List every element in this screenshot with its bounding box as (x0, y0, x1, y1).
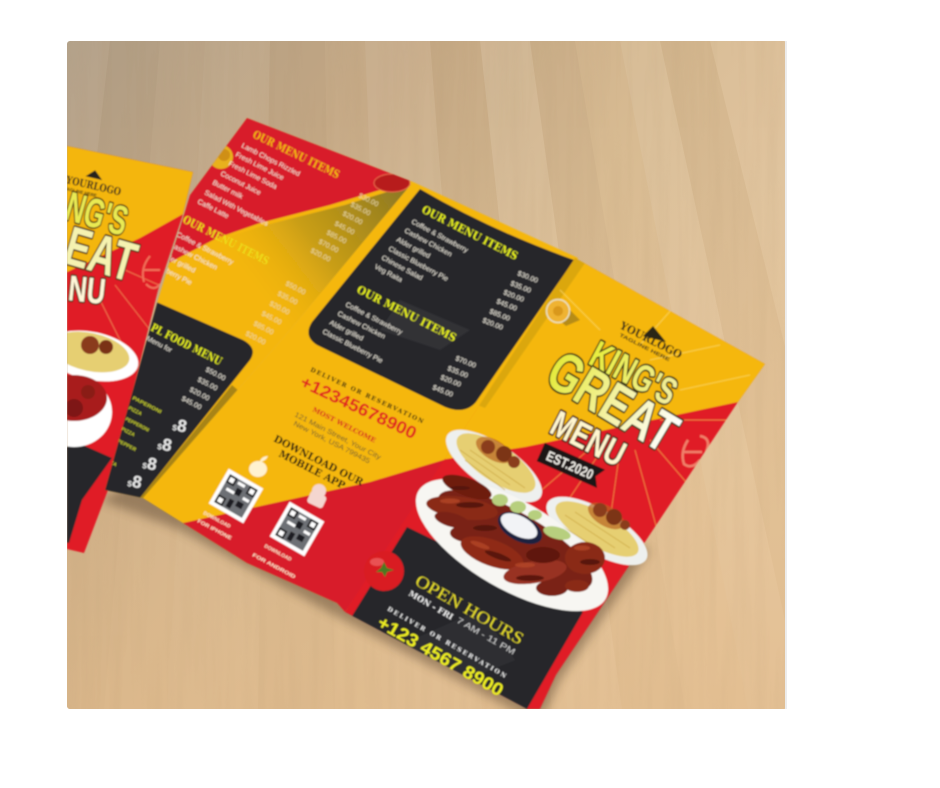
open hours block (374, 571, 527, 700)
icon: tomato (364, 551, 404, 591)
red swirl (143, 256, 160, 288)
prices: $35.00 (349, 202, 371, 218)
logo: YOURLOGO (64, 174, 122, 198)
left cover title: EAT (58, 215, 144, 293)
prices: $85.00 (325, 230, 347, 246)
menu list one (373, 203, 539, 332)
QR labels: FOR IPHONE (196, 518, 233, 542)
download heading: DOWNLOAD OUR (272, 434, 365, 489)
dark box content: PEPPERONI (124, 416, 150, 434)
est ribbon: EST.2020 (544, 448, 596, 483)
prices: $35.00 (276, 291, 298, 307)
left cover title (67, 190, 142, 306)
dark box content (102, 321, 226, 492)
dark box content: $8 (156, 434, 173, 455)
first list: Caffe Latte (196, 199, 230, 220)
title: GREAT (537, 338, 689, 464)
prices: $20.00 (341, 211, 363, 227)
menu list two: $70.00 (454, 355, 477, 370)
menu list two: $20.00 (439, 374, 462, 389)
second list: OUR MENU ITEMS (181, 213, 271, 268)
open hours block: OPEN HOURS (412, 571, 527, 648)
food menu dark box (100, 300, 253, 498)
prices (244, 193, 379, 347)
icon: android (306, 484, 327, 509)
dark menu box (308, 189, 574, 410)
menu list one: $30.00 (516, 270, 539, 285)
prices: $70.00 (317, 239, 339, 255)
dark box content: PAPERONI (131, 395, 163, 416)
left brochure cover (67, 145, 194, 554)
second list: Blueberry Pie (152, 262, 193, 287)
open hours block: DELIVER OR RESERVATION (386, 606, 508, 680)
dark box content: $8 (171, 415, 188, 436)
menu list one: Chinese Salad (380, 255, 424, 282)
lemon garnish (209, 145, 233, 169)
right edge strip (785, 41, 787, 709)
menu list two: Coffee & Strawberry (344, 302, 404, 337)
prices: $20.00 (309, 248, 331, 264)
dark box content: PIZZA (120, 426, 136, 439)
QR code: iPhone (209, 469, 263, 523)
dark footer (67, 438, 112, 543)
first list: Coconut Juice (219, 171, 262, 197)
menu list one: Coffee & Strawberry (410, 219, 469, 255)
dark box content: $8 (126, 471, 143, 492)
logo: TAGLINE HERE (64, 186, 97, 198)
second list: Alder grilled (160, 252, 196, 275)
prices: $85.00 (252, 321, 274, 337)
first list: Fresh Lime Juice (234, 152, 285, 182)
open hours block: 7 AM - 11 PM (455, 615, 517, 657)
dark box content: PIZZA (102, 456, 118, 469)
brochure shadow (104, 491, 652, 709)
menu list one: Veg Raita (373, 264, 403, 284)
menu list two: $35.00 (446, 365, 469, 380)
prices: $45.00 (260, 311, 282, 327)
menu list one: Cashew Chicken (403, 228, 453, 258)
first list: Lamb Chops Rizzled (240, 143, 301, 178)
QR labels: DOWNLOAD (202, 510, 232, 530)
sunburst rays (542, 418, 727, 527)
icon: lemon (546, 300, 580, 326)
delivery phone block: MOST WELCOME (311, 406, 377, 445)
prices: $30.00 (357, 193, 379, 209)
dark box content: Menu for (145, 336, 173, 355)
title (547, 338, 685, 467)
logo: TAGLINE HERE (618, 332, 672, 364)
delivery phone block (292, 366, 425, 465)
first list: Butter milk (211, 180, 244, 201)
dark box content: PL FOOD MENU (149, 321, 224, 368)
menu list one: Classic Blueberry Pie (387, 246, 449, 283)
prices: $50.00 (284, 281, 306, 297)
delivery phone block: 121 Main Street, Your City (293, 412, 382, 462)
dark box content: $8 (141, 453, 158, 474)
yellow top of cover (435, 258, 765, 462)
QR labels: FOR ANDROID (251, 552, 297, 581)
first list: Fresh Lime Soda (227, 161, 278, 191)
menu list one: $20.00 (481, 317, 504, 332)
logo (67, 170, 122, 198)
first list (196, 128, 342, 228)
food plate: pasta right (537, 483, 657, 579)
QR labels (196, 510, 297, 581)
left cover title: NU (67, 268, 107, 312)
menu list two: OUR MENU ITEMS (355, 283, 459, 345)
food plate: chicken wings (396, 453, 628, 637)
yellow header area (67, 146, 193, 272)
sun rays (100, 269, 158, 342)
title: KING'S (583, 334, 684, 414)
open hours block: +123 4567 8900 (374, 612, 507, 700)
photo: wooden table background (67, 41, 785, 709)
prices: $45.00 (333, 221, 355, 237)
download heading: MOBILE APP (277, 449, 347, 492)
menu list one: $20.00 (502, 289, 525, 304)
red lower area (183, 458, 450, 612)
left cover title: NG'S (60, 184, 133, 245)
menu list one: $85.00 (488, 308, 511, 323)
food plate: pasta top (435, 416, 553, 516)
dark box content: $45.00 (180, 396, 202, 412)
QR code: Android (270, 502, 324, 556)
second list (165, 214, 270, 286)
inner panel B: yellow contact panel (143, 182, 578, 612)
prices: $20.00 (244, 331, 266, 347)
dark footer of cover (352, 527, 583, 709)
menu list two (321, 283, 477, 399)
red swirl decoration (683, 436, 708, 466)
fold shadow band (140, 385, 240, 500)
icon: apple (249, 456, 268, 477)
QR labels: DOWNLOAD (263, 543, 293, 563)
dark box content: PEPPER (116, 438, 137, 453)
dark box content: $20.00 (188, 387, 210, 403)
first list: OUR MENU ITEMS (251, 128, 342, 181)
second list: Salad (145, 272, 164, 286)
prices: $20.00 (268, 301, 290, 317)
open hours block: MON - FRI (407, 588, 456, 622)
first list: Salad With Vegetables (203, 190, 269, 228)
dark box content: PIZZA (127, 405, 143, 418)
delivery phone block: DELIVER OR RESERVATION (309, 366, 425, 425)
menu list two: Alder grilled (328, 320, 364, 343)
menu list two: $45.00 (431, 384, 454, 399)
tomato swirl garnish (374, 174, 410, 192)
logo: YOURLOGO (617, 319, 684, 362)
dark box content: $35.00 (196, 377, 218, 393)
menu list one: $45.00 (495, 298, 518, 313)
cover panel (345, 258, 765, 709)
menu list one: $35.00 (509, 280, 532, 295)
second list: Coffee & Strawberry (175, 232, 235, 267)
left cover plates (67, 329, 140, 383)
menu list two: Classic Blueberry Pie (321, 329, 384, 365)
delivery phone block: +12345678900 (297, 372, 420, 443)
inner panel A: red and yellow brochure panel (100, 100, 420, 505)
menu list one: OUR MENU ITEMS (420, 203, 520, 263)
menu list two: Cashew Chicken (336, 311, 386, 341)
dark box content: $50.00 (204, 367, 226, 383)
title: MENU (544, 403, 632, 475)
delivery phone block: New York, USA 799435 (292, 421, 371, 465)
second list: Cashew Chicken (168, 242, 218, 272)
menu list one: Alder grilled (395, 237, 431, 260)
